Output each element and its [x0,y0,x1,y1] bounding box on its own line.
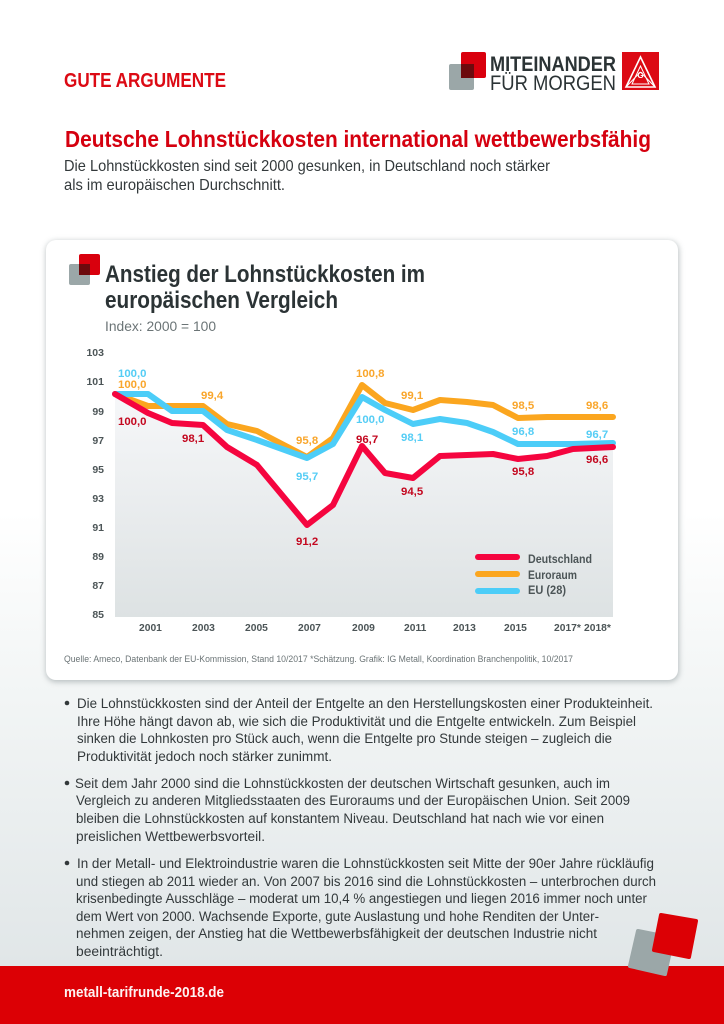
text block: bullet 1: Die Lohnstückkosten sind der Anteil der Entgelte an den Herstellungskosten einer Produkteinheit. [77,696,653,712]
value labels: Deutschland: 95,8 [512,466,534,478]
text block: bullet 3: beeinträchtigt. [76,944,163,960]
line: EU (28) [115,394,613,458]
value labels: EU (28): 96,7 [586,429,608,441]
text block: bullet 3: nehmen zeigen, der Anstieg hat die Wettbewerbsfähigkeit der deutschen Industrie nicht [76,926,597,942]
y axis labels [86,347,104,621]
text block: bullet 3: krisenbedingte Ausschläge – moderat um 10,4 % angestiegen und liegen 2016 immer noch unter [76,891,647,907]
x axis labels: 2003 [192,623,215,634]
text block: bullet 2: bleiben die Lohnstückkosten auf konstantem Niveau. Deutschland hat nach wie vor einen [76,811,604,827]
value labels: Euroraum: 98,6 [586,400,608,412]
line chart [86,347,613,634]
value labels: Euroraum: 99,4 [201,390,224,402]
y axis labels: 95 [92,464,104,476]
x axis labels: 2005 [245,623,268,634]
value labels: EU (28): 96,8 [512,426,534,438]
y axis labels: 87 [92,580,104,592]
logo: Miteinander für Morgen [449,52,616,95]
text block: bullet 1: sinken die Lohnkosten pro Stück auch, wenn die Entgelte pro Stunde steigen – zugleich die [77,731,612,747]
logo: IG Metall [622,52,659,90]
logo: Miteinander für Morgen: MITEINANDER [490,53,616,76]
chart heading [105,261,425,314]
line: Deutschland [115,394,613,525]
logo: IG Metall: G [637,71,644,80]
y axis labels: 93 [92,493,104,505]
value labels: Deutschland: 94,5 [401,486,424,498]
line: Euroraum [115,385,613,457]
y axis labels: 99 [92,406,104,418]
y axis labels: 101 [86,376,104,388]
text block: bullet 2: preislichen Wettbewerbsvorteil. [76,829,265,845]
subtitle: Die Lohnstückkosten sind seit 2000 gesunken, in Deutschland noch stärker [64,158,551,175]
value labels: Deutschland: 98,1 [182,433,205,445]
footer band [0,966,724,1024]
text block: bullet 2 [65,776,630,845]
x axis labels: 2007 [298,623,321,634]
source note: Quelle: Ameco, Datenbank der EU-Kommission, Stand 10/2017 *Schätzung. Grafik: IG Metall, Koordination Branchenpolitik, 10/2017 [64,654,573,664]
value labels: EU (28): 98,1 [401,432,424,444]
chart heading: europäischen Vergleich [105,287,338,314]
legend: Euroraum [528,568,577,582]
heading: Gute Argumente: GUTE ARGUMENTE [64,70,226,92]
text block: bullet 3 [65,856,656,960]
legend [478,552,592,597]
value labels: EU (28): 95,7 [296,471,318,483]
value labels: Deutschland: 100,0 [118,416,147,428]
x axis labels: 2013 [453,623,476,634]
value labels: EU (28): 100,0 [118,368,147,380]
value labels: EU (28) [118,368,608,483]
legend: EU (28) [528,583,566,597]
text block: bullet 1 [65,696,653,765]
value labels: Euroraum: 100,0 [118,379,147,391]
chart subtitle: index: Index: 2000 = 100 [105,319,216,334]
x axis labels: 2017* [554,623,581,634]
y axis labels: 103 [86,347,104,359]
footer url: metall-tarifrunde-2018.de [64,984,224,1001]
text block: bullet 1: Ihre Höhe hängt davon ab, wie sich die Produktivität und die Entgelte entwickeln. Zum Beispiel [77,714,636,730]
y axis labels: 85 [92,609,104,621]
x axis labels: 2018* [584,623,611,634]
chart area under Germany line [115,394,613,617]
text block: bullet 2: Seit dem Jahr 2000 sind die Lohnstückkosten der deutschen Wirtschaft gesunken, auch im [75,776,610,792]
subtitle [64,158,551,194]
y axis labels: 97 [92,435,104,447]
text block: bullet 3: dem Wert von 2000. Wachsende Exporte, gute Auslastung und hohe Renditen der Unter- [76,909,599,925]
logo: Miteinander für Morgen: FÜR MORGEN [490,72,616,95]
y axis labels: 91 [92,522,104,534]
x axis labels [139,623,611,634]
value labels: Deutschland: 96,6 [586,454,608,466]
main title: Deutsche Lohnstückkosten international wettbewerbsfähig [65,126,651,152]
x axis labels: 2009 [352,623,375,634]
icon: rotated squares [630,915,696,974]
value labels: Euroraum: 99,1 [401,390,424,402]
text block: bullet 1: Produktivität jedoch noch stärker zunimmt. [77,749,332,765]
value labels: Deutschland: 96,7 [356,434,378,446]
icon: overlapping squares [69,254,100,285]
value labels: Euroraum: 98,5 [512,400,535,412]
x axis labels: 2001 [139,623,162,634]
value labels: Deutschland [118,416,608,548]
panel: chart card [46,240,679,682]
text block: bullet 2: Vergleich zu anderen Mitgliedsstaaten des Euroraums und der Europäischen Union. Seit 2009 [76,793,630,809]
value labels: Euroraum: 100,8 [356,368,385,380]
subtitle: als im europäischen Durchschnitt. [64,177,285,194]
y axis labels: 89 [92,551,104,563]
x axis labels: 2015 [504,623,527,634]
x axis labels: 2011 [404,623,427,634]
legend: Deutschland [528,552,592,566]
chart heading: Anstieg der Lohnstückkosten im [105,261,425,288]
value labels: Euroraum: 95,8 [296,435,318,447]
text block: bullet 3: In der Metall- und Elektroindustrie waren die Lohnstückkosten seit Mitte der 90er Jahre rückläufig [77,856,654,872]
text block: bullet 3: und stiegen ab 2011 wieder an. Von 2007 bis 2016 sind die Lohnstückkosten – unterbrochen durch [76,874,656,890]
value labels: Deutschland: 91,2 [296,536,318,548]
value labels: EU (28): 100,0 [356,414,385,426]
value labels: Euroraum [118,368,608,447]
